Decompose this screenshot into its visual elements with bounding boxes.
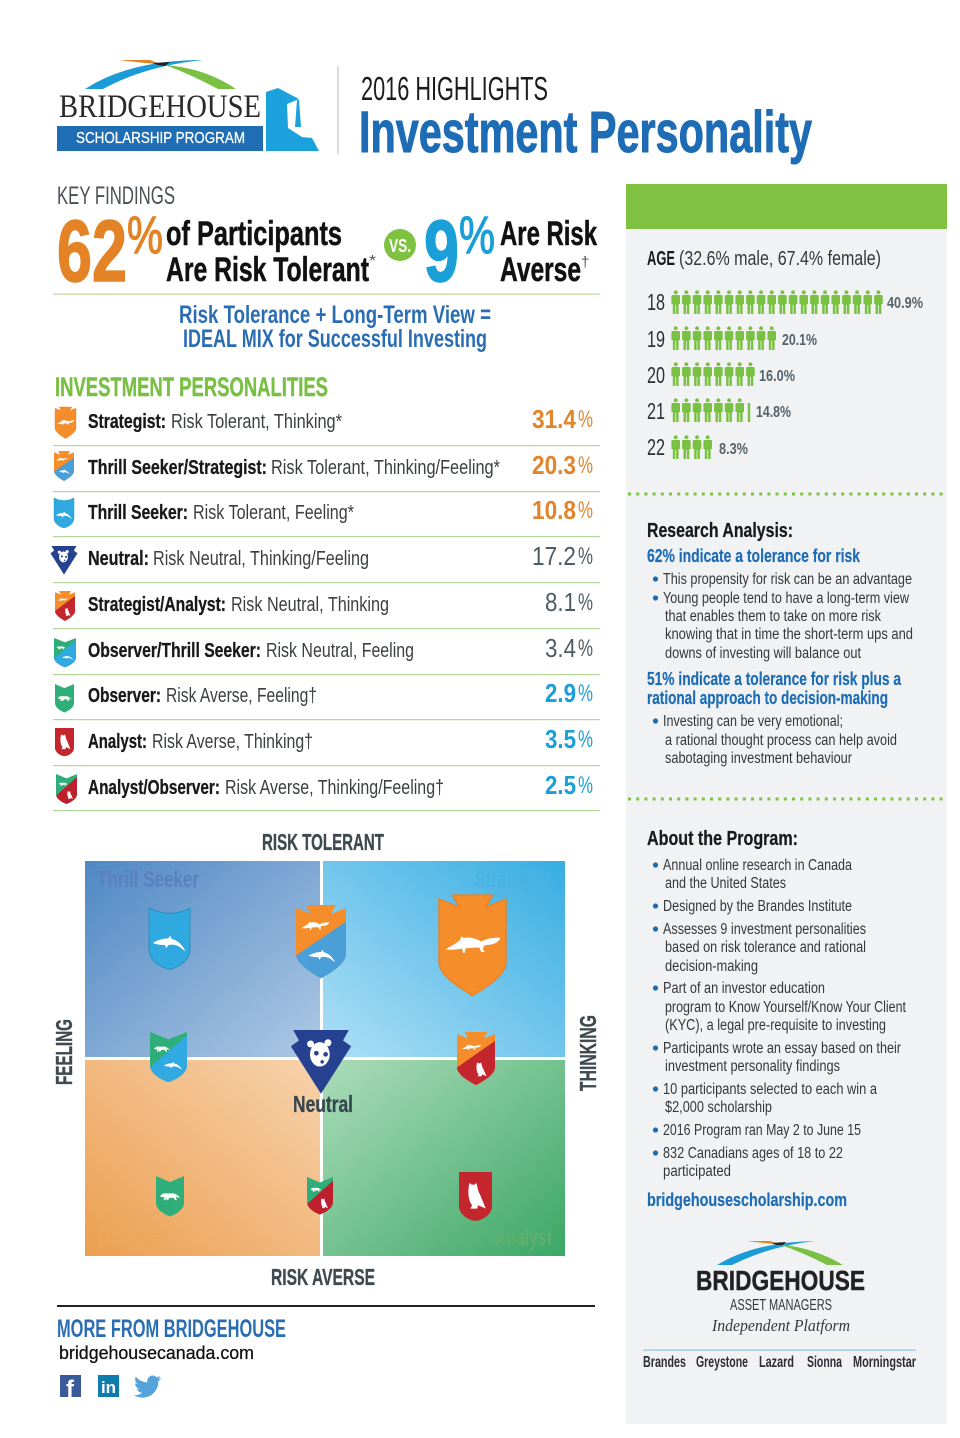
quadrant: strategist xyxy=(323,861,565,1057)
partner names: Greystone xyxy=(696,1354,748,1371)
about the program xyxy=(647,827,907,1210)
row: Analyst: Analyst: xyxy=(88,731,147,753)
more from bridgehouse: bridgehousecanada.com xyxy=(59,1342,254,1363)
row: Observer: Risk Averse, Feeling† xyxy=(166,685,317,707)
research analysis: that enables them to take on more risk xyxy=(665,608,881,625)
personality matrix xyxy=(85,861,565,1256)
row: Observer/Thrill Seeker: 3.4 xyxy=(545,633,576,663)
vs badge xyxy=(384,229,416,261)
personality list xyxy=(50,404,600,811)
research analysis: Research Analysis: xyxy=(647,519,793,542)
row: Observer: % xyxy=(578,680,593,707)
icon: linkedin xyxy=(98,1375,119,1397)
row: Strategist/Analyst: 8.1 xyxy=(545,587,576,617)
badge: thrill seeker/strategist xyxy=(296,905,346,978)
axis label: thinking: THINKING xyxy=(575,1015,601,1091)
row: Observer/Thrill Seeker: % xyxy=(578,635,593,662)
row: Observer/Thrill Seeker: Risk Neutral, Feeling xyxy=(266,640,414,662)
age 21 row: 21 xyxy=(647,398,665,424)
about the program: participated xyxy=(663,1163,731,1180)
badge: observer/thrill seeker xyxy=(150,1032,187,1082)
age 22 row: 8.3% xyxy=(719,441,748,458)
quadrant: analyst: Analyst xyxy=(495,1224,552,1250)
age pictogram chart xyxy=(647,289,923,460)
more from bridgehouse xyxy=(57,1315,286,1363)
age 20 row: 16.0% xyxy=(759,368,795,385)
key finding: 9 percent risk averse: 9 xyxy=(424,203,459,300)
research analysis: 62% indicate a tolerance for risk xyxy=(647,546,861,566)
sidebar green header xyxy=(626,184,947,229)
quadrant: thrill seeker xyxy=(85,861,320,1057)
row: Analyst/Observer: 2.5 xyxy=(545,770,576,800)
age heading: AGE xyxy=(647,248,675,270)
research analysis: a rational thought process can help avoid xyxy=(665,732,897,749)
ideal mix statement xyxy=(179,301,491,353)
logo: Bridgehouse Asset Managers: Independent Platform xyxy=(711,1316,850,1335)
age 20 row xyxy=(647,362,795,388)
partner names: Brandes xyxy=(643,1354,686,1371)
key finding: 9 percent risk averse: Are Risk xyxy=(500,215,597,253)
key finding: 62 percent risk tolerant: of Participants xyxy=(166,215,342,253)
row: Thrill Seeker: 10.8 xyxy=(532,495,576,525)
header title: 2016 HIGHLIGHTS xyxy=(361,70,548,107)
header title xyxy=(359,70,812,165)
row: Neutral: % xyxy=(578,543,593,570)
partner names xyxy=(643,1354,916,1371)
age 18 row: 18 xyxy=(647,289,665,315)
badge: thrill seeker xyxy=(149,908,190,970)
age 20 row: 20 xyxy=(647,362,665,388)
header divider xyxy=(338,66,339,154)
quadrant: observer: Observer xyxy=(97,1224,168,1250)
row: Analyst xyxy=(55,724,593,756)
quadrant: thrill seeker: Thrill Seeker xyxy=(97,866,199,892)
investment personalities heading: INVESTMENT PERSONALITIES xyxy=(55,372,328,402)
row: Observer/Thrill Seeker: Observer/Thrill Seeker: xyxy=(88,640,261,662)
row: Strategist: Strategist: xyxy=(88,411,166,433)
about the program: $2,000 scholarship xyxy=(665,1099,772,1116)
badge: analyst/observer xyxy=(307,1177,333,1214)
about the program: program to Know Yourself/Know Your Client xyxy=(665,999,907,1016)
about the program: decision-making xyxy=(665,958,758,975)
about the program: About the Program: xyxy=(647,827,798,850)
about the program: bridgehousescholarship.com xyxy=(647,1190,847,1210)
row: Strategist: % xyxy=(578,406,593,433)
about the program: Assesses 9 investment personalities xyxy=(663,921,866,938)
about the program: (KYC), a legal pre-requisite to investing xyxy=(665,1017,886,1034)
about the program: investment personality findings xyxy=(665,1058,840,1075)
row: Thrill Seeker/Strategist: 20.3 xyxy=(532,450,576,480)
key finding: 62 percent risk tolerant xyxy=(57,203,376,300)
about the program: based on risk tolerance and rational xyxy=(665,939,866,956)
label: neutral: Neutral xyxy=(293,1091,353,1117)
age 19 row: 19 xyxy=(647,326,665,352)
age heading: (32.6% male, 67.4% female) xyxy=(679,248,881,270)
key finding: 62 percent risk tolerant: % xyxy=(127,206,163,265)
logo: Bridgehouse Scholarship Program: SCHOLARSHIP PROGRAM xyxy=(76,130,245,147)
logo: Bridgehouse Asset Managers: BRIDGEHOUSE xyxy=(696,1265,865,1296)
about the program: Participants wrote an essay based on their xyxy=(663,1040,901,1057)
age 21 row xyxy=(647,398,791,424)
badge: strategist/analyst xyxy=(457,1032,495,1085)
about the program: 832 Canadians ages of 18 to 22 xyxy=(663,1145,843,1162)
age 18 row: 40.9% xyxy=(887,295,923,312)
partner names: Sionna xyxy=(807,1354,842,1371)
key finding: 9 percent risk averse: Averse xyxy=(500,251,581,289)
research analysis xyxy=(647,519,913,767)
panel: sidebar xyxy=(626,184,947,1424)
research analysis: Investing can be very emotional; xyxy=(663,713,843,730)
research analysis: rational approach to decision-making xyxy=(647,688,888,708)
age 21 row: 14.8% xyxy=(756,404,791,421)
key finding: 62 percent risk tolerant: Are Risk Tolerant xyxy=(166,251,369,289)
row: Thrill Seeker: % xyxy=(578,497,593,524)
research analysis: Young people tend to have a long-term view xyxy=(663,590,910,607)
quadrant: observer xyxy=(85,1060,320,1256)
row: Analyst/Observer: % xyxy=(578,772,593,799)
logo: Bridgehouse Asset Managers: ASSET MANAGERS xyxy=(730,1297,832,1314)
axis label: risk tolerant: RISK TOLERANT xyxy=(262,829,384,855)
about the program: and the United States xyxy=(665,875,786,892)
row: Thrill Seeker/Strategist: % xyxy=(578,452,593,479)
key findings heading: KEY FINDINGS xyxy=(57,182,175,210)
row: Analyst/Observer: Analyst/Observer: xyxy=(88,777,220,799)
row: Strategist/Analyst: % xyxy=(578,589,593,616)
badge: strategist xyxy=(439,895,506,996)
vs badge: VS. xyxy=(389,236,411,256)
row: Neutral xyxy=(50,541,593,575)
age 22 row xyxy=(647,434,748,460)
ideal mix statement: IDEAL MIX for Successful Investing xyxy=(183,325,487,353)
key finding: 9 percent risk averse: † xyxy=(581,254,589,271)
row: Thrill Seeker/Strategist xyxy=(54,450,593,481)
row: Observer/Thrill Seeker xyxy=(54,633,593,667)
key finding: 9 percent risk averse: % xyxy=(459,206,495,265)
research analysis: sabotaging investment behaviour xyxy=(665,750,852,767)
row: Observer: 2.9 xyxy=(545,678,576,708)
logo: Bridgehouse Scholarship Program xyxy=(57,60,319,151)
row: Thrill Seeker/Strategist: Thrill Seeker/Strategist: xyxy=(88,457,267,479)
age 18 row xyxy=(647,289,923,315)
row: Analyst/Observer: Risk Averse, Thinking/Feeling† xyxy=(225,777,444,799)
icon: facebook xyxy=(60,1375,81,1403)
age 22 row: 22 xyxy=(647,434,665,460)
icon: linkedin: in xyxy=(101,1378,116,1397)
icon: facebook: f xyxy=(66,1376,75,1403)
partner names: Morningstar xyxy=(853,1354,916,1371)
row: Analyst: Risk Averse, Thinking† xyxy=(152,731,313,753)
axis label: risk averse: RISK AVERSE xyxy=(271,1264,375,1290)
row: Strategist/Analyst xyxy=(55,587,593,621)
key finding: 62 percent risk tolerant: 62 xyxy=(57,203,127,300)
axis label: feeling: FEELING xyxy=(51,1019,77,1085)
badge: neutral xyxy=(291,1030,351,1094)
row: Strategist/Analyst: Strategist/Analyst: xyxy=(88,594,226,616)
age 19 row xyxy=(647,326,817,352)
about the program: Annual online research in Canada xyxy=(663,857,852,874)
row: Strategist/Analyst: Risk Neutral, Thinking xyxy=(231,594,389,616)
research analysis: knowing that in time the short-term ups and xyxy=(665,626,913,643)
key finding: 62 percent risk tolerant: * xyxy=(369,253,376,270)
row: Observer xyxy=(55,678,593,712)
research analysis: downs of investing will balance out xyxy=(665,645,862,662)
badge: analyst xyxy=(459,1172,492,1221)
more from bridgehouse: MORE FROM BRIDGEHOUSE xyxy=(57,1315,286,1343)
row: Analyst/Observer xyxy=(56,770,593,804)
key finding: 9 percent risk averse xyxy=(424,203,597,300)
row: Thrill Seeker xyxy=(54,495,593,528)
row: Thrill Seeker: Risk Tolerant, Feeling* xyxy=(193,502,354,524)
about the program: 2016 Program ran May 2 to June 15 xyxy=(663,1122,861,1139)
age 19 row: 20.1% xyxy=(782,332,817,349)
ideal mix statement: Risk Tolerance + Long-Term View = xyxy=(179,301,491,329)
row: Analyst: 3.5 xyxy=(545,724,576,754)
row: Strategist xyxy=(55,404,593,438)
row: Analyst: % xyxy=(578,726,593,753)
about the program: Designed by the Brandes Institute xyxy=(663,898,852,915)
about the program: 10 participants selected to each win a xyxy=(663,1081,877,1098)
badge: observer xyxy=(156,1176,184,1216)
logo: Bridgehouse Scholarship Program: BRIDGEHOUSE xyxy=(59,89,261,125)
row: Neutral: Risk Neutral, Thinking/Feeling xyxy=(153,548,369,570)
row: Neutral: Neutral: xyxy=(88,548,149,570)
row: Thrill Seeker/Strategist: Risk Tolerant, Thinking/Feeling* xyxy=(271,457,500,479)
row: Neutral: 17.2 xyxy=(532,541,576,571)
about the program: Part of an investor education xyxy=(663,980,825,997)
row: Observer: Observer: xyxy=(88,685,161,707)
research analysis: This propensity for risk can be an advantage xyxy=(663,571,912,588)
row: Strategist: 31.4 xyxy=(532,404,576,434)
partner names: Lazard xyxy=(759,1354,794,1371)
quadrant: strategist: Strategist xyxy=(475,866,550,892)
quadrant: analyst xyxy=(323,1060,565,1256)
row: Strategist: Risk Tolerant, Thinking* xyxy=(171,411,342,433)
row: Thrill Seeker: Thrill Seeker: xyxy=(88,502,188,524)
logo: Bridgehouse Asset Managers xyxy=(696,1241,865,1335)
icon: twitter xyxy=(134,1376,161,1398)
